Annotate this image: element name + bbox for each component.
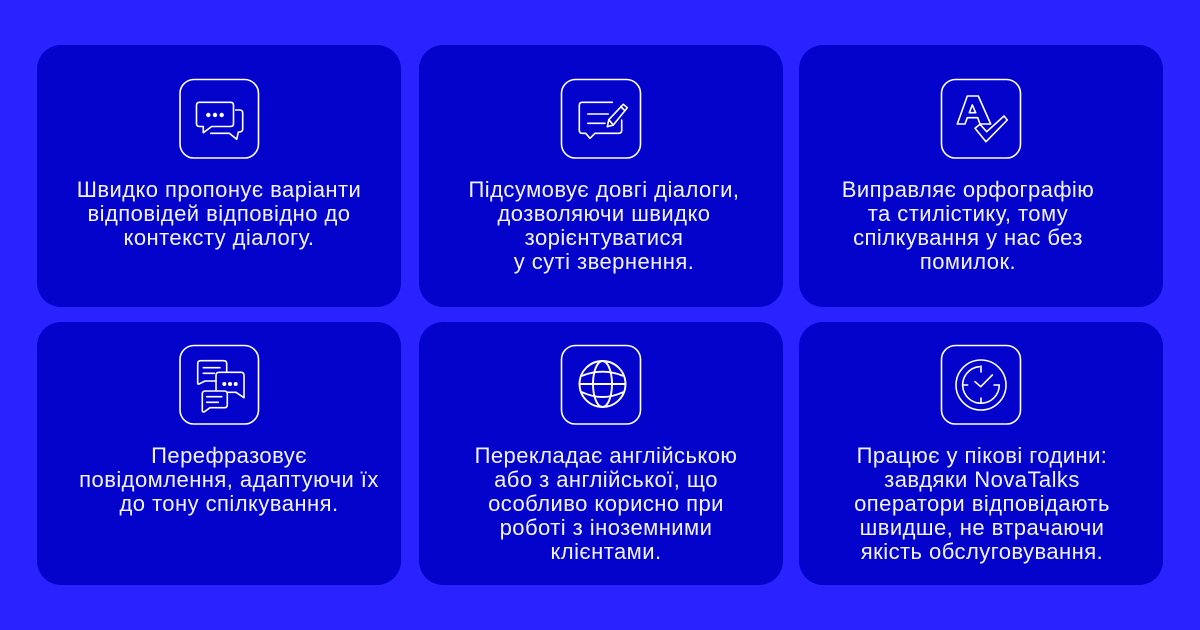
icon: globe — [560, 344, 642, 425]
text: suggestions: контексту діалогу. — [124, 225, 314, 250]
text: rephrase: Перефразовує — [151, 443, 307, 468]
text: translation — [475, 443, 737, 564]
icon: chat bubbles with dots — [179, 78, 260, 159]
icon: three speech bubbles — [179, 344, 260, 425]
text: summary: Підсумовує довгі діалоги, — [469, 177, 739, 202]
text: translation: Перекладає англійською — [475, 443, 737, 468]
text: suggestions — [77, 177, 361, 250]
text: peak hours: Працює у пікові години: — [857, 443, 1107, 468]
text: spelling: Виправляє орфографію — [842, 177, 1094, 202]
icon: clock with check — [940, 344, 1022, 425]
text: spelling: помилок. — [920, 249, 1016, 274]
text: rephrase — [79, 443, 379, 516]
text: rephrase: повідомлення, адаптуючи їх — [79, 467, 379, 492]
text: peak hours: оператори відповідають — [854, 491, 1110, 516]
text: translation: роботі з іноземними — [500, 515, 712, 540]
text: spelling — [842, 177, 1094, 274]
text: summary: зорієнтуватися — [525, 225, 683, 250]
text: spelling: та стилістику, тому — [868, 201, 1068, 226]
text: rephrase: до тону спілкування. — [119, 491, 339, 516]
text: peak hours: завдяки NovaTalks — [884, 467, 1080, 492]
text: summary: дозволяючи швидко — [498, 201, 710, 226]
text: summary — [469, 177, 739, 274]
text: suggestions: відповідей відповідно до — [88, 201, 350, 226]
panel: rephrase — [37, 322, 401, 585]
panel: spelling — [799, 45, 1163, 307]
text: peak hours: швидше, не втрачаючи — [860, 515, 1104, 540]
panel: suggestions — [37, 45, 401, 307]
text: spelling: спілкування у нас без — [853, 225, 1083, 250]
text: summary: у суті звернення. — [514, 249, 694, 274]
text: translation: або з англійської, що — [494, 467, 718, 492]
panel: translation — [419, 322, 783, 585]
text: peak hours: якість обслуговування. — [861, 539, 1103, 564]
text: translation: особливо корисно при — [488, 491, 724, 516]
panel: peak hours — [799, 322, 1163, 585]
text: suggestions: Швидко пропонує варіанти — [77, 177, 361, 202]
icon: letter A with check mark — [940, 78, 1022, 159]
text: translation: клієнтами. — [550, 539, 662, 564]
text: peak hours — [854, 443, 1110, 564]
panel: summary — [419, 45, 783, 307]
icon: message with pencil — [560, 78, 642, 159]
